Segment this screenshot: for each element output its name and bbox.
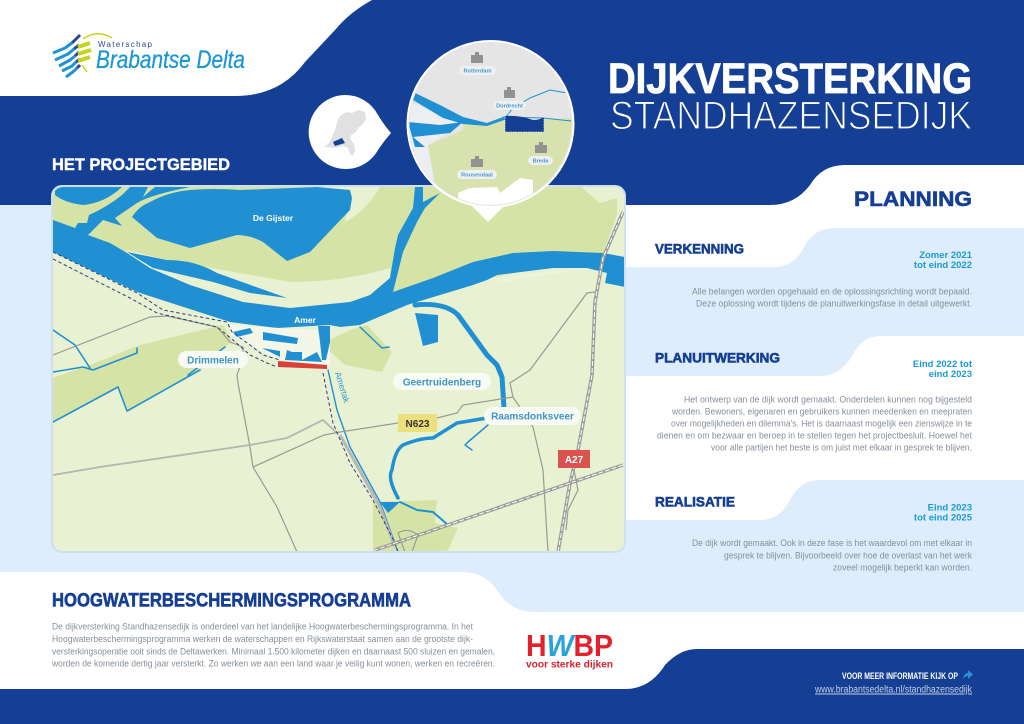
label: Raamsdonksveer: Raamsdonksveer [491, 412, 574, 422]
icon: arrow [963, 670, 973, 679]
description [51, 622, 495, 670]
logo text small: Waterschap [98, 40, 153, 49]
period [914, 502, 973, 524]
label: Roosendaal: Roosendaal [461, 172, 493, 178]
title [608, 55, 972, 138]
description: De dijk wordt gemaakt. Ook in deze fase is het waardevol om met elkaar in [692, 538, 972, 549]
road sign: A27 [558, 450, 590, 468]
logo: Waterschap Brabantse Delta [53, 34, 245, 77]
label: Dordrecht: Dordrecht [496, 104, 523, 110]
icon: Breda [535, 142, 547, 153]
description: Hoogwaterbeschermingsprogramma werken de waterschappen en Rijkswaterstaat samen aan de grootste dijk- [52, 634, 473, 645]
road sign: N623: N623 [406, 419, 430, 430]
description [692, 286, 972, 310]
label: Breda: Breda [533, 158, 549, 164]
callout: Netherlands locator [309, 95, 391, 169]
description: dienen en om bezwaar en beroep in te stellen tegen het projectbesluit. Hoewel het [657, 430, 972, 442]
description: De dijkversterking Standhazensedijk is onderdeel van het landelijke Hoogwaterbeschermingsprogramma. In het [52, 622, 473, 632]
heading: HOOGWATERBESCHERMINGSPROGRAMMA [52, 590, 411, 612]
description: Deze oplossing wordt tijdens de planuitwerkingsfase in detail uitgewerkt. [696, 298, 972, 310]
label: Breda [528, 156, 553, 165]
callout: regional inset circle [400, 41, 574, 222]
panel: realisatie [655, 494, 973, 574]
heading: VERKENNING [655, 240, 744, 256]
logo text large: Brabantse Delta [96, 46, 245, 74]
footer label: VOOR MEER INFORMATIE KIJK OP [842, 671, 958, 682]
label: Drimmelen: Drimmelen [187, 356, 239, 366]
road sign: N623 [398, 414, 437, 432]
label: Drimmelen [178, 351, 248, 368]
description: worden. Bewoners, eigenaren en gebruikers kunnen meedenken en meepraten [671, 406, 972, 418]
railway dashed lines [53, 252, 398, 552]
inset project area [505, 113, 544, 132]
description: zoveel mogelijk beperkt kan worden. [833, 562, 972, 574]
logo: HWBP: voor sterke dijken [526, 658, 613, 670]
description: gesprek te blijven. Bijvoorbeeld over hoe de overlast van het werk [724, 550, 972, 562]
label: De Gijster: De Gijster [253, 213, 294, 223]
inset land [410, 104, 572, 205]
label: Roosendaal [457, 170, 497, 179]
title line 2: STANDHAZENSEDIJK [610, 94, 972, 138]
period: Eind 2022 tot [913, 359, 973, 370]
description: Het ontwerp van de dijk wordt gemaakt. Onderdelen kunnen nog bijgesteld [684, 394, 972, 406]
panel: hoogwaterbeschermingsprogramma [51, 590, 495, 670]
period: tot eind 2022 [914, 260, 972, 271]
icon: Dordrecht [504, 87, 515, 98]
label: Geertruidenberg [393, 373, 491, 390]
description [692, 538, 972, 574]
period: Eind 2023 [928, 502, 972, 514]
panel: planuitwerking [655, 350, 973, 454]
icon: Roosendaal [471, 156, 483, 167]
panel: project map [52, 186, 625, 552]
water: canals and streams [53, 304, 504, 552]
motorways [375, 212, 623, 552]
icon: Rotterdam [471, 52, 483, 63]
title line 1: DIJKVERSTERKING [608, 55, 972, 103]
logo: HWBP: HWBP [526, 628, 613, 663]
red dike section [278, 361, 327, 369]
period: Zomer 2021 [919, 250, 973, 261]
panel: verkenning [655, 240, 973, 310]
period [914, 250, 973, 271]
description: worden de komende dertig jaar versterkt. Zo werken we aan een land waar je veilig kunt wonen, werken en recreëren. [51, 658, 495, 670]
description: voor alle partijen het beste is om juist met elkaar in gesprek te blijven. [711, 442, 972, 454]
map of the Netherlands [324, 110, 366, 156]
inset rivers [408, 90, 572, 147]
description: versterkingsoperatie ooit sinds de Deltawerken. Minimaal 1.500 kilometer dijken en daarnaast 500 sluizen en gemalen, [52, 646, 495, 658]
roads [53, 292, 595, 552]
footer: more information [814, 670, 973, 696]
road sign: A27: A27 [565, 455, 584, 466]
description: over mogelijkheden en dilemma’s. Het is daarnaast mogelijk een zienswijze in te [671, 418, 972, 430]
water: Amer river and branches [53, 187, 625, 328]
period: tot eind 2025 [914, 512, 973, 524]
label: Rotterdam: Rotterdam [464, 68, 492, 74]
footer link: www.brabantsedelta.nl/standhazensedijk [814, 684, 973, 696]
label: Rotterdam [459, 66, 496, 75]
label: Amertak: Amertak [333, 371, 352, 405]
label: Geertruidenberg: Geertruidenberg [403, 378, 481, 388]
heading: het projectgebied: HET PROJECTGEBIED [52, 155, 230, 174]
period [913, 359, 973, 380]
icon: logo waves [53, 34, 112, 77]
period: eind 2023 [929, 369, 972, 380]
label: Raamsdonksveer [484, 407, 581, 425]
land areas [52, 186, 617, 552]
label: Amer: Amer [294, 315, 317, 325]
heading: REALISATIE [655, 494, 735, 510]
description: Alle belangen worden opgehaald en de oplossingsrichting wordt bepaald. [692, 286, 972, 298]
project province marker [333, 138, 345, 146]
harbour Drimmelen [230, 325, 330, 366]
description [657, 394, 972, 454]
heading: PLANUITWERKING [655, 350, 780, 366]
heading: planning: PLANNING [854, 188, 972, 211]
label: Dordrecht [493, 101, 526, 110]
